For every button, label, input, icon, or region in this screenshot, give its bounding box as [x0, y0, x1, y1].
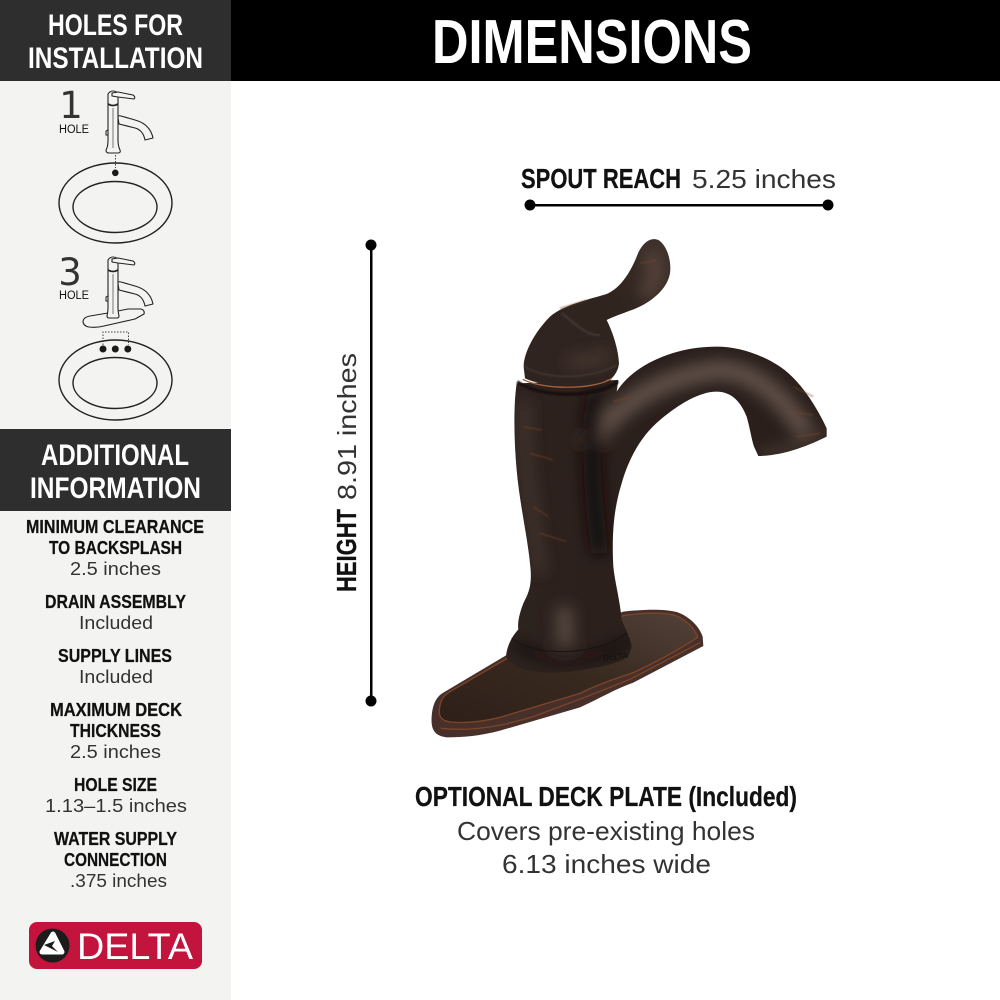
text block: supply lines: Included [79, 667, 153, 687]
heading line two: INSTALLATION [28, 42, 203, 75]
text block: hole size [45, 774, 187, 816]
text block: drain assembly: Included [79, 613, 153, 633]
label: 3 hole [58, 251, 89, 302]
icon: one hole installation [59, 84, 172, 243]
text block: water supply connection: WATER SUPPLY [54, 828, 178, 849]
value: 8.91 inches [332, 353, 362, 500]
text block: hole size: HOLE SIZE [74, 774, 157, 795]
heading line one: HOLES FOR [48, 9, 183, 42]
text block: water supply connection: .375 inches [70, 871, 167, 891]
label: 3 hole: 3 [58, 251, 82, 294]
heading line one: ADDITIONAL [41, 439, 189, 472]
callout: optional deck plate [415, 781, 797, 879]
label: HEIGHT [331, 509, 362, 592]
text block: water supply connection: CONNECTION [64, 849, 167, 870]
deck plate [432, 610, 703, 737]
title: DIMENSIONS: DIMENSIONS [432, 8, 752, 77]
text block: drain assembly [45, 591, 187, 633]
text block: minimum clearance: MINIMUM CLEARANCE [26, 516, 204, 537]
text block: maximum deck thickness: 2.5 inches [70, 742, 161, 762]
label: 3 hole: HOLE [59, 290, 89, 302]
label: 1 hole: 1 [59, 84, 83, 127]
faucet photo illustration [432, 239, 827, 737]
dashed bracket [103, 332, 128, 345]
dashed connector [114, 155, 116, 168]
dimension line [524, 200, 834, 210]
text block: minimum clearance: 2.5 inches [70, 559, 161, 579]
label: OPTIONAL DECK PLATE (Included) [415, 781, 797, 812]
description line two: 6.13 inches wide [502, 849, 711, 879]
icon: faucet with deck plate [83, 257, 153, 327]
icon: single faucet [106, 91, 153, 153]
dimension line [366, 240, 376, 706]
brushed copper streaks [523, 260, 820, 542]
text block: maximum deck thickness: THICKNESS [70, 720, 161, 741]
collar ring [517, 379, 618, 394]
text block: maximum deck thickness: MAXIMUM DECK [50, 699, 183, 720]
value: 5.25 inches [692, 164, 836, 194]
panel: left sidebar background [0, 0, 231, 1000]
logo wordmark: DELTA [77, 926, 193, 967]
text block: drain assembly: DRAIN ASSEMBLY [45, 591, 187, 612]
header: holes for installation [0, 0, 231, 81]
heading line two: INFORMATION [30, 472, 201, 505]
label: SPOUT REACH [521, 163, 681, 194]
handle [524, 239, 670, 386]
text block: minimum clearance [26, 516, 204, 579]
text block: supply lines: SUPPLY LINES [58, 645, 172, 666]
text block: water supply connection [54, 828, 178, 891]
deck plate brand mark: DELTA [603, 651, 629, 663]
logo: Delta [29, 922, 202, 969]
label: 1 hole: HOLE [59, 124, 89, 136]
callout: spout reach [521, 163, 836, 210]
callout: height [331, 240, 376, 706]
basin [59, 163, 172, 243]
description line one: Covers pre-existing holes [457, 816, 755, 846]
hole [112, 170, 119, 176]
label: 1 hole [59, 84, 89, 136]
text block: minimum clearance: TO BACKSPLASH [49, 537, 182, 558]
basin [59, 340, 172, 420]
logo mark [36, 928, 70, 962]
header: additional information [0, 429, 231, 511]
faucet body and spout [506, 347, 827, 673]
icon: three hole installation [58, 251, 172, 420]
header: dimensions banner [231, 0, 1000, 81]
text block: hole size: 1.13–1.5 inches [45, 796, 187, 816]
text block: maximum deck thickness [50, 699, 183, 762]
holes [100, 346, 131, 352]
base ring line [512, 633, 627, 652]
text block: supply lines [58, 645, 172, 687]
